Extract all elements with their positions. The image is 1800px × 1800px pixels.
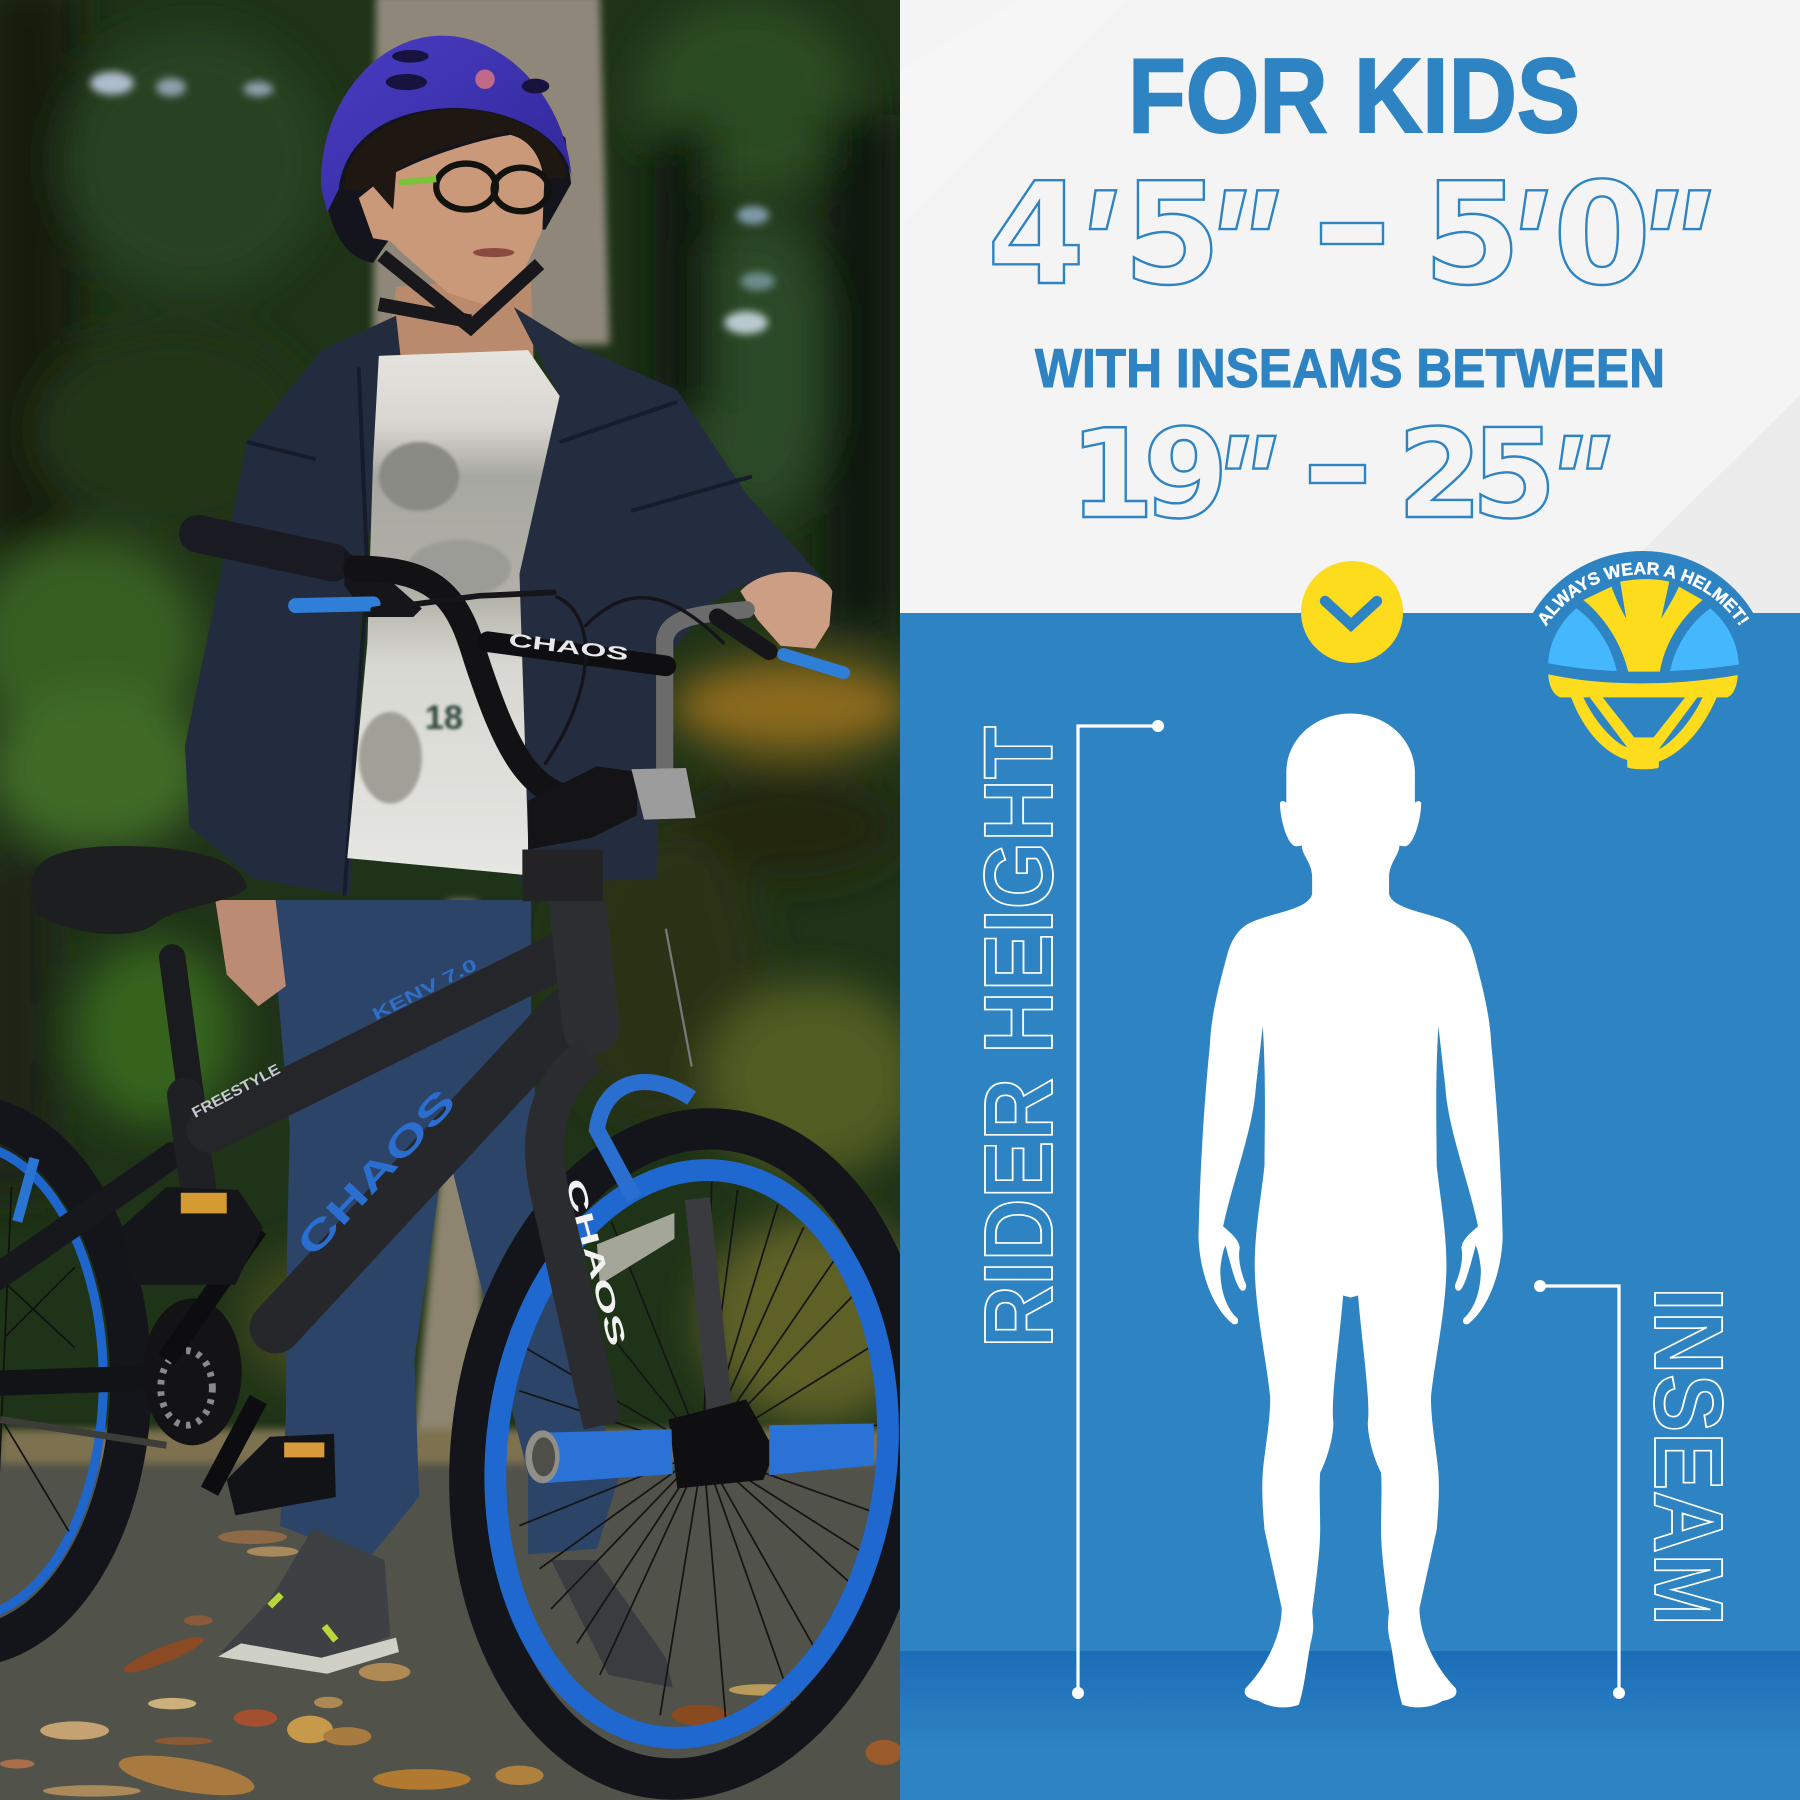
outlined height range [987,153,1711,330]
badge slogan: ALWAYS WEAR A HELMET! [1538,562,1750,627]
outlined height range: " [1635,157,1711,330]
helmet vents and strap [379,50,549,327]
outlined height range: ' [1075,157,1117,330]
subheading: with inseams between: WITH INSEAMS BETWEEN [1035,338,1665,399]
photo: boy with BMX bike in forest [0,0,945,1800]
glasses [399,164,549,211]
helmet yellow straps [1548,674,1738,769]
handlebars [198,534,844,801]
helmet [321,36,572,212]
inseam label: INSEAM [1634,1287,1743,1626]
frame graphics: CHAOS [289,1081,464,1264]
wrist hand [740,572,832,649]
face [359,135,544,306]
pants [270,900,620,1560]
forest background [0,0,930,1800]
child silhouette [1198,714,1503,1707]
rider height measure line [1072,720,1164,1699]
icon: always wear a helmet badge [1532,551,1754,770]
outlined height range: 4 [987,153,1085,317]
shirt print [359,442,511,804]
icon: yellow chevron button [1301,561,1403,663]
rider height label: RIDER HEIGHT [964,726,1073,1348]
jacket [185,316,402,895]
frame graphics: KENV 7.0 [369,954,480,1024]
axle pegs [525,1399,874,1488]
shirt print: 18 [425,699,463,737]
leaves on ground [0,1530,902,1800]
boy upper body [185,36,832,895]
outlined inseam range: " [1212,407,1276,554]
outlined inseam range: 5 [1471,404,1557,547]
jacket seams [247,367,752,895]
shoes [218,1529,673,1688]
outlined height range: " [1203,157,1279,330]
handlebars: CHAOS [508,629,630,664]
ground [0,1429,901,1800]
outlined inseam range: 1 [1069,404,1155,547]
fork and brake [545,929,720,1425]
frame graphics [189,954,480,1264]
tree trunk [373,0,610,344]
outlined inseam range: 9 [1143,404,1229,547]
neck [392,282,534,358]
outlined inseam range: " [1546,407,1610,554]
outlined height range: 5 [1423,153,1521,317]
frame [0,900,591,1383]
rear wheel [0,1116,131,1646]
outlined inseam range [1069,404,1610,554]
title: FOR KIDS: FOR KIDS [1128,37,1580,155]
shirt [347,350,560,875]
inseam measure line [1534,1280,1625,1699]
panel: sizing background [900,0,1800,1800]
helmet yellow crown [1583,579,1703,672]
outlined height range: 5 [1123,153,1221,317]
saddle [32,846,247,934]
chain and drivetrain [0,1158,336,1515]
outlined height range: ' [1506,157,1548,330]
helmet inner shell [324,100,571,263]
hand at side [215,900,286,1006]
stem and reflector [522,766,696,901]
front wheel [449,1108,900,1800]
frame graphics: FREESTYLE [189,1061,283,1122]
front wheel spokes [519,1181,895,1724]
helmet light blue shells [1548,608,1739,671]
outlined height range: 0 [1553,153,1651,317]
fork and brake: CHAOS [560,1176,631,1349]
hair [344,109,565,212]
mouth [473,248,514,257]
outlined inseam range: 2 [1397,404,1483,547]
